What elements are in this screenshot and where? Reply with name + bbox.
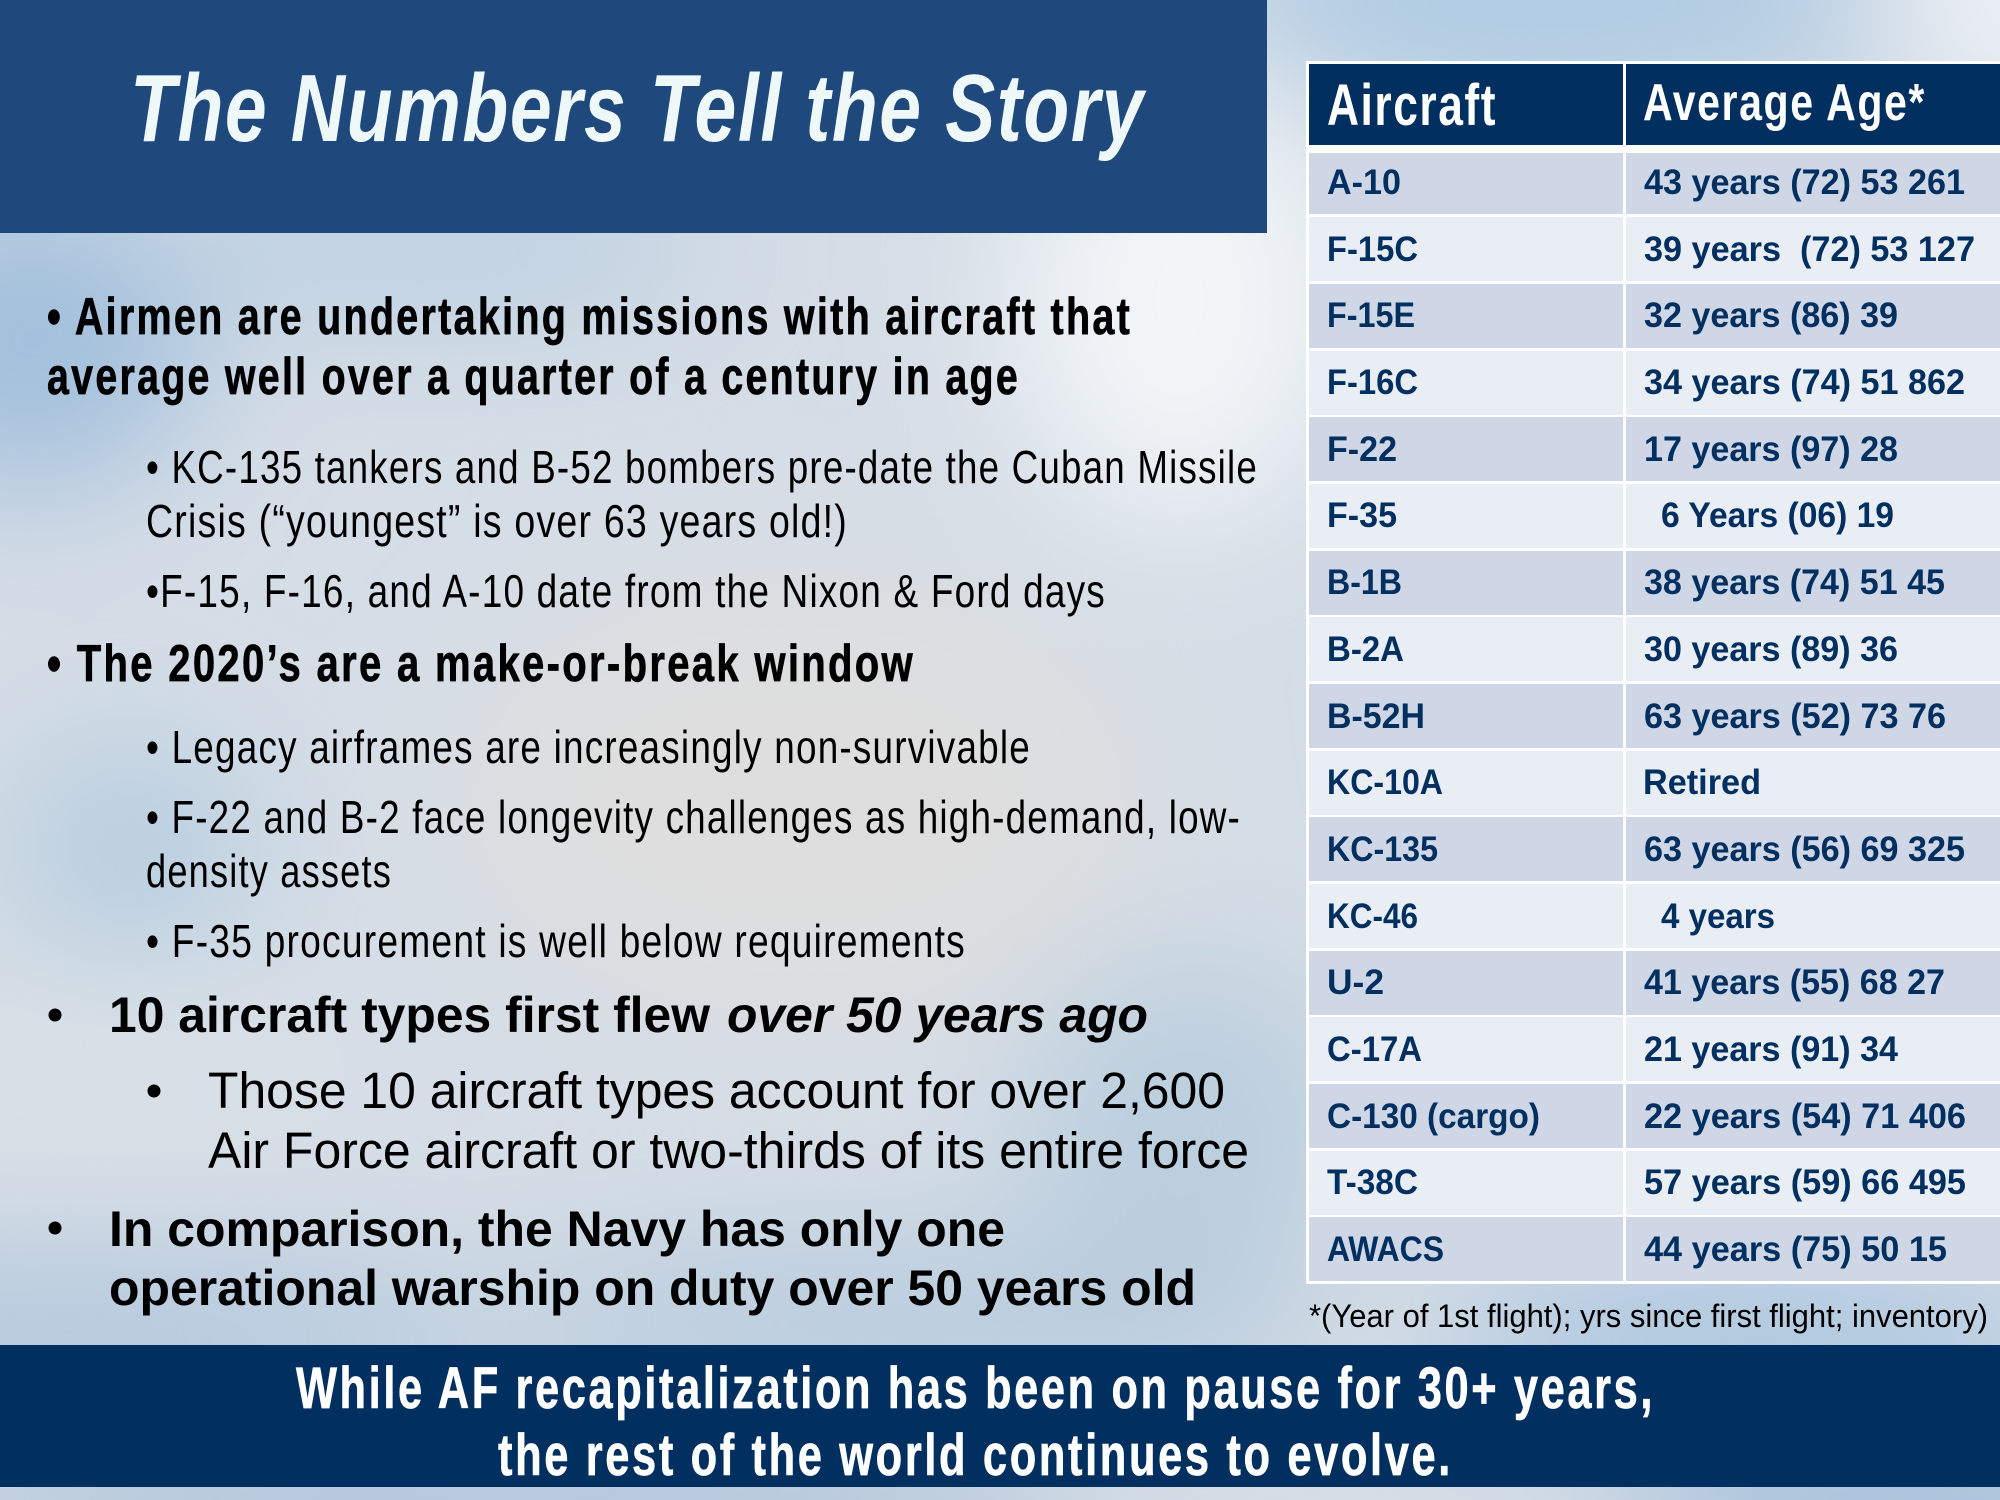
row: U-2: U-2: [1327, 963, 1384, 1002]
row: KC-46: [1309, 884, 2000, 948]
row: T-38C: 57 years (59) 66 495: [1644, 1163, 1966, 1202]
row: KC-10A: Retired: [1643, 763, 1761, 802]
sub-bullet: F-22 and B-2: density assets: [146, 845, 392, 897]
bullet: make-or-break window: • The 2020’s are a make-or-break window: [47, 635, 915, 693]
title panel: [0, 0, 1267, 233]
sub-bullet: KC-135 and B-52: • KC-135 tankers and B-52 bombers pre-date the Cuban Missile: [146, 441, 1258, 493]
sub-bullet: KC-135 and B-52: Crisis (“youngest” is over 63 years old!): [146, 495, 848, 547]
row: A-10: A-10: [1327, 163, 1401, 202]
row: F-16C: [1309, 351, 2000, 415]
bullet: 10 aircraft types: [48, 987, 1148, 1043]
row: F-35: F-35: [1327, 496, 1397, 535]
bullet: 10 aircraft types: over 50 years ago: [727, 987, 1148, 1043]
table header: [1309, 64, 2000, 145]
sub-bullet: F-35 procurement: • F-35 procurement is well below requirements: [146, 915, 966, 967]
sub-bullet: F-22 and B-2: [146, 791, 1241, 897]
row: A-10: 43 years (72) 53 261: [1644, 163, 1965, 202]
row: F-15E: [1309, 284, 2000, 348]
row: KC-135: KC-135: [1327, 830, 1438, 869]
row: F-15E: 32 years (86) 39: [1644, 296, 1898, 335]
row: B-1B: 38 years (74) 51 45: [1644, 563, 1945, 602]
row: KC-10A: [1309, 751, 2000, 815]
row: B-1B: [1309, 551, 2000, 615]
row: AWACS: AWACS: [1327, 1230, 1444, 1269]
row: KC-135: [1309, 817, 2000, 881]
bullet: aging aircraft: [47, 288, 1132, 406]
table header: Average Age*: [1643, 74, 1926, 132]
sub-bullet: two-thirds of force: Those 10 aircraft types account for over 2,600: [208, 1062, 1225, 1119]
row: AWACS: [1309, 1217, 2000, 1281]
sub-bullet: F-15, F-16, A-10: •F-15, F-16, and A-10 date from the Nixon & Ford days: [146, 565, 1106, 617]
bullet: aging aircraft: • Airmen are undertaking missions with aircraft that: [47, 288, 1132, 346]
sub-bullet: KC-135 and B-52: [146, 441, 1258, 547]
row: B-2A: [1309, 617, 2000, 681]
row: B-1B: B-1B: [1327, 563, 1402, 602]
table header: Aircraft: [1327, 73, 1497, 138]
bullet: Navy comparison: [48, 1201, 1196, 1316]
row: C-17A: C-17A: [1327, 1030, 1422, 1069]
sub-bullet: two-thirds of force: Air Force aircraft or two-thirds of its entire force: [208, 1122, 1249, 1179]
row: F-15E: F-15E: [1327, 296, 1415, 335]
row: U-2: [1309, 951, 2000, 1015]
row: F-15C: [1309, 217, 2000, 281]
banner text: [296, 1356, 1655, 1488]
row: B-2A: 30 years (89) 36: [1644, 630, 1898, 669]
bullet list: [47, 288, 1258, 1316]
row: B-52H: [1309, 684, 2000, 748]
sub-bullet: two-thirds of force: [148, 1062, 1249, 1179]
row: T-38C: [1309, 1151, 2000, 1215]
row: F-22: 17 years (97) 28: [1644, 430, 1898, 469]
row: AWACS: 44 years (75) 50 15: [1644, 1230, 1947, 1269]
row: KC-46: KC-46: [1327, 897, 1418, 936]
aircraft age table: [1306, 61, 2000, 1284]
bullet: Navy comparison: operational warship on duty over 50 years old: [109, 1260, 1196, 1316]
row: F-15C: 39 years (72) 53 127: [1644, 230, 1975, 269]
bottom banner: [0, 1345, 2000, 1488]
row: C-130 (cargo): 22 years (54) 71 406: [1644, 1097, 1966, 1136]
row: C-17A: 21 years (91) 34: [1644, 1030, 1899, 1069]
row: F-35: [1309, 484, 2000, 548]
row: KC-46: 4 years: [1661, 897, 1775, 936]
row: B-52H: 63 years (52) 73 76: [1644, 697, 1946, 736]
row: F-16C: F-16C: [1327, 363, 1418, 402]
row: F-22: F-22: [1327, 430, 1397, 469]
row: C-130 (cargo): C-130 (cargo): [1327, 1097, 1540, 1136]
row: B-2A: B-2A: [1327, 630, 1404, 669]
sub-bullet: legacy airframes: • Legacy airframes are increasingly non-survivable: [146, 721, 1031, 773]
sub-bullet: F-22 and B-2: • F-22 and B-2 face longevity challenges as high-demand, low-: [146, 791, 1241, 843]
row: U-2: 41 years (55) 68 27: [1644, 963, 1945, 1002]
row: F-22: [1309, 417, 2000, 481]
row: KC-10A: KC-10A: [1327, 763, 1443, 802]
row: F-15C: F-15C: [1327, 230, 1418, 269]
row: A-10: [1309, 153, 2000, 214]
banner text: the rest of the world continues to evolve.: [498, 1423, 1453, 1488]
table footnote: *(Year of 1st flight); yrs since first flight; inventory): [1309, 1298, 1988, 1334]
bullet: 10 aircraft types: 10 aircraft types first flew: [109, 987, 710, 1043]
bullet: Navy comparison: In comparison, the Navy has only one: [109, 1201, 1005, 1257]
row: F-35: 6 Years (06) 19: [1661, 496, 1894, 535]
row: C-130 (cargo): [1309, 1084, 2000, 1148]
bullet: aging aircraft: average well over a quarter of a century in age: [47, 348, 1020, 406]
row: B-52H: B-52H: [1327, 697, 1425, 736]
title: The Numbers Tell the Story: [130, 55, 1147, 162]
row: F-16C: 34 years (74) 51 862: [1644, 363, 1965, 402]
row: C-17A: [1309, 1017, 2000, 1081]
row: T-38C: T-38C: [1327, 1163, 1418, 1202]
row: KC-135: 63 years (56) 69 325: [1644, 830, 1965, 869]
